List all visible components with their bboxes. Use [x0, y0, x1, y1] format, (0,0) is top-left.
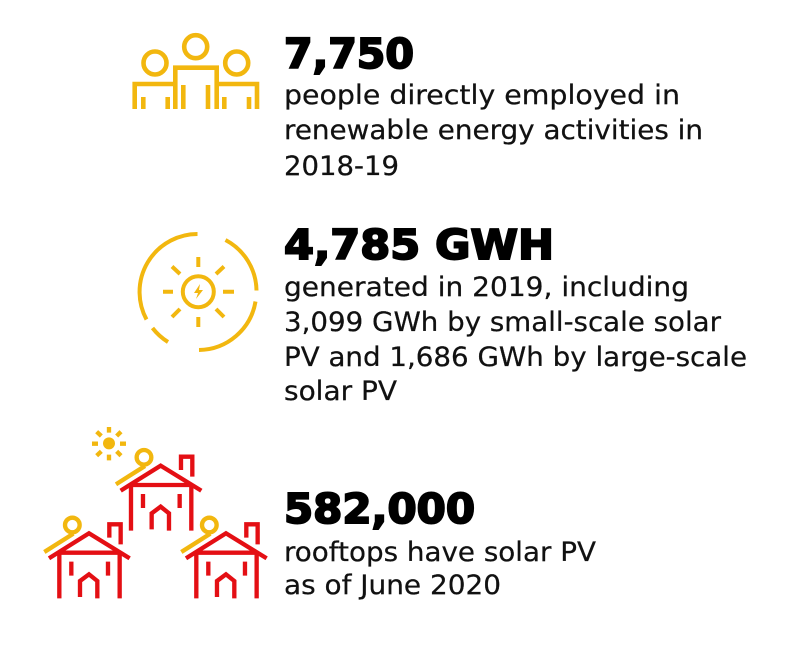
house: left: [44, 518, 130, 598]
text: rooftops description: rooftops have solar PV: [284, 537, 597, 568]
heading: 7,750: 7,750: [284, 30, 414, 78]
house: right: [181, 518, 267, 598]
text: rooftops description: as of June 2020: [284, 570, 501, 601]
icon: small sun: [92, 427, 126, 460]
text: generation description: solar PV: [284, 376, 398, 407]
text: generation description: generated in 2019, including: [284, 272, 689, 303]
stat: generation: [284, 221, 747, 407]
text: employment description: people directly employed in: [284, 80, 680, 111]
icon: sun with energy bolt: [140, 234, 256, 350]
icon: rooftops with solar panels: [44, 427, 267, 598]
text: generation description: PV and 1,686 GWh by large-scale: [284, 342, 747, 373]
house: top: [116, 450, 201, 531]
text: generation description: [284, 272, 747, 407]
text: rooftops description: [284, 537, 597, 601]
text: employment description: [284, 80, 703, 182]
heading: 582,000: 582,000: [284, 485, 475, 533]
icon: people: [135, 35, 257, 109]
heading: 4,785 GWH: 4,785 GWH: [284, 221, 554, 269]
text: employment description: renewable energy activities in: [284, 115, 703, 146]
stat: employment: [284, 30, 703, 182]
stat: rooftops: [284, 485, 597, 601]
text: generation description: 3,099 GWh by small-scale solar: [284, 307, 722, 338]
text: employment description: 2018-19: [284, 151, 399, 182]
